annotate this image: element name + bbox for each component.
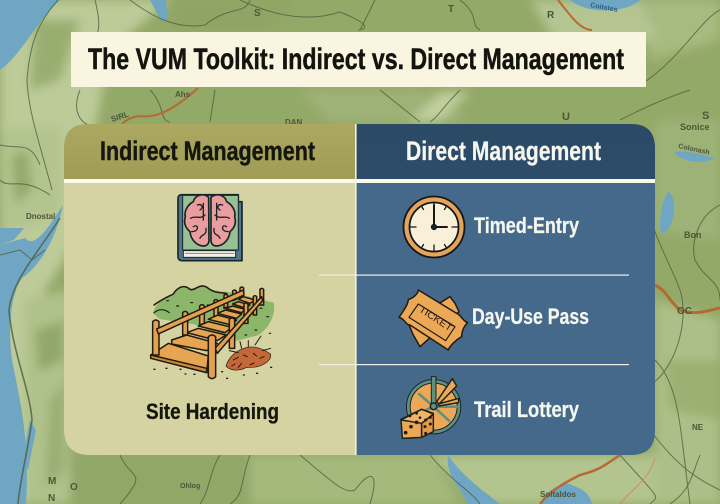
label: timed-entry: Timed-Entry: [474, 213, 580, 238]
map labels: OC: [677, 306, 692, 317]
map labels: T: [448, 4, 454, 15]
icon: tickets: TICKET: [417, 304, 454, 333]
heading: indirect management: Indirect Management: [100, 136, 315, 166]
map labels: Colonash: [678, 143, 710, 157]
map labels: S: [702, 110, 709, 122]
map labels: Ahs: [175, 90, 191, 99]
map labels: Dnostal: [26, 212, 55, 221]
label: day-use pass: Day-Use Pass: [472, 304, 589, 329]
map labels: S: [254, 8, 261, 19]
map labels: Ohlog: [180, 483, 200, 490]
icon: clock: [404, 196, 464, 258]
map labels: Coitstes: [590, 2, 618, 14]
map labels: NE: [692, 423, 704, 432]
icon: wooden boardwalk and mulch: [151, 286, 274, 379]
map labels: SIRL: [110, 110, 130, 124]
map labels: Soltaldos: [540, 490, 577, 499]
map labels: M: [48, 476, 56, 487]
label: trail lottery: Trail Lottery: [474, 397, 580, 422]
label: site hardening: Site Hardening: [146, 399, 279, 424]
heading: direct management: Direct Management: [406, 136, 601, 166]
icon: wheel and dice: [401, 377, 459, 438]
map labels: O: [70, 482, 78, 493]
panel: direct management: [356, 124, 655, 455]
icon: tickets: [399, 290, 468, 350]
map labels: R: [547, 10, 555, 21]
map labels: U: [562, 111, 570, 123]
map labels: Bon: [684, 230, 702, 240]
map labels: N: [48, 493, 55, 504]
title banner: [71, 32, 646, 87]
map labels: DAN: [285, 118, 303, 127]
icon: brain on book: [178, 195, 242, 261]
panel: indirect management: [64, 124, 355, 455]
map labels: Sonice: [680, 122, 710, 132]
